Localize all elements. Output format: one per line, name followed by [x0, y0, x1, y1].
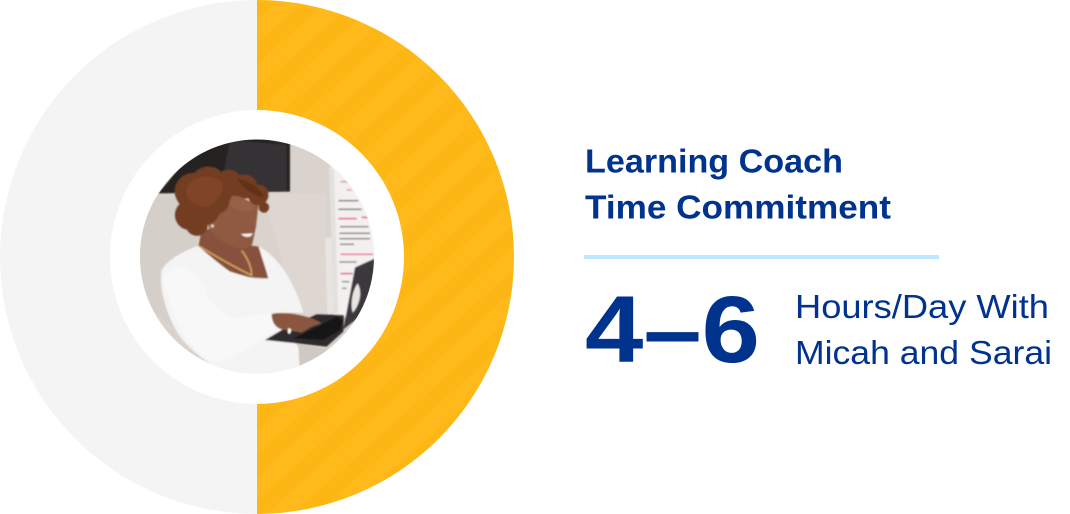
necklace [198, 246, 252, 275]
arm [163, 268, 277, 362]
caption line 1: Hours/Day With [795, 289, 1049, 326]
photo: learning coach with laptop [137, 138, 383, 375]
face [208, 193, 258, 249]
body / white top [161, 246, 303, 375]
wall shading [140, 196, 198, 310]
caption [795, 289, 1052, 372]
donut hole [110, 110, 404, 404]
forehead over hair [230, 196, 248, 201]
heading line 2: Time Commitment [585, 188, 891, 226]
divider rule [584, 255, 939, 259]
neck and chest [198, 223, 268, 278]
wall under laptop [295, 343, 330, 370]
tv [158, 138, 290, 193]
donut highlighted half segment [257, 0, 514, 514]
whiteboard [330, 166, 374, 318]
big number: 4–6 [585, 277, 760, 383]
caption line 2: Micah and Sarai [795, 335, 1052, 372]
donut chart [0, 0, 514, 514]
hair [175, 167, 269, 236]
laptop base [265, 314, 344, 347]
heading [585, 142, 891, 226]
earring [211, 224, 214, 228]
donut remainder segment [0, 0, 257, 514]
hand [272, 313, 322, 333]
heading line 1: Learning Coach [585, 142, 843, 180]
laptop screen [343, 258, 375, 329]
